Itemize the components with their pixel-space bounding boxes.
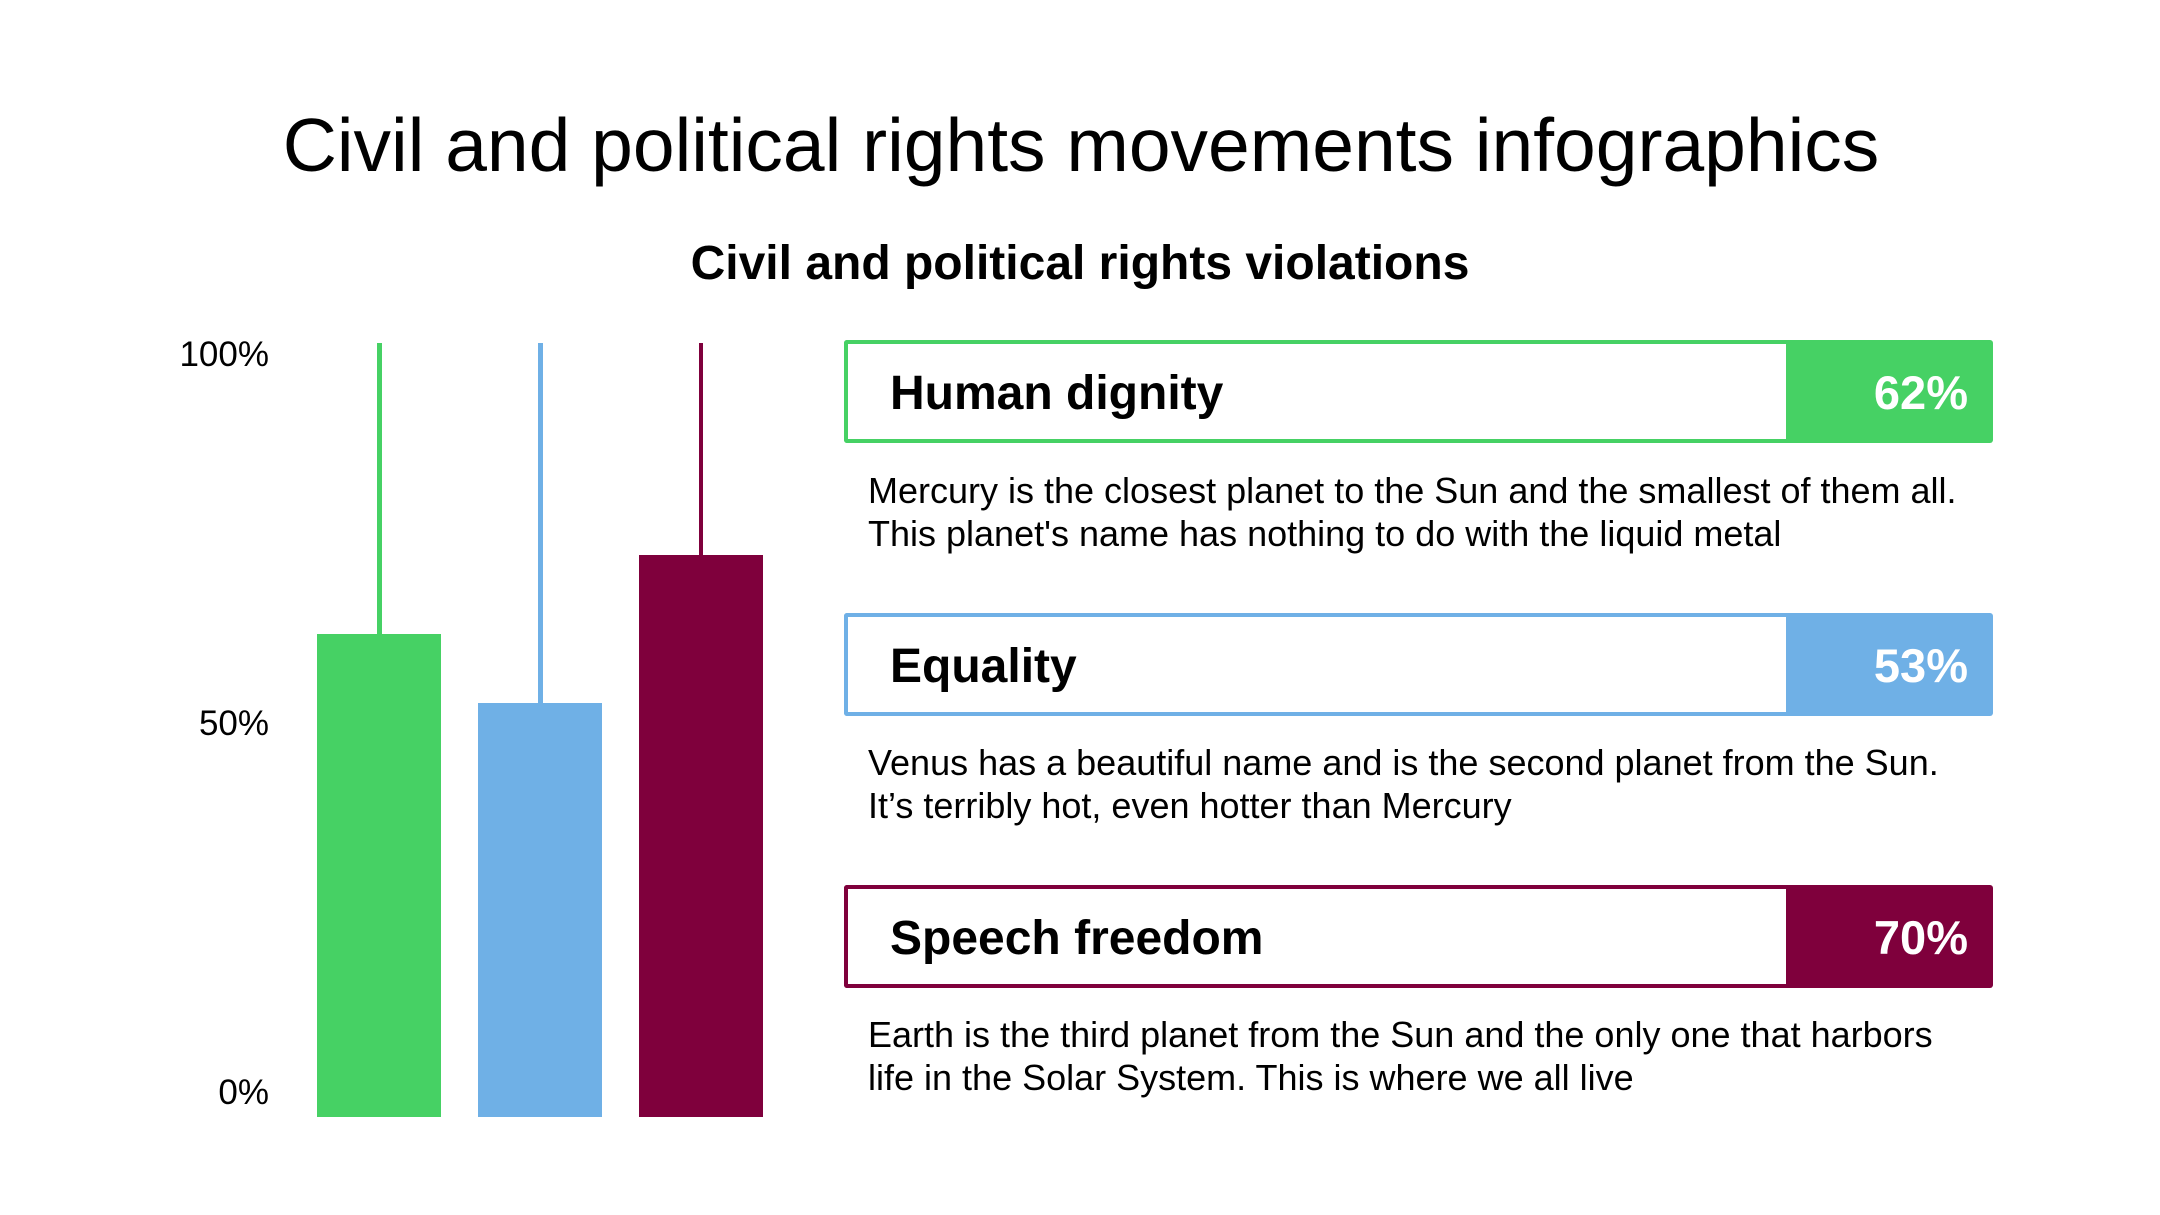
bar: blue 53%	[478, 703, 602, 1117]
line: blue	[538, 343, 542, 705]
text: Speech freedom description: life in the Solar System. This is where we all live	[868, 1057, 1634, 1098]
text: Speech freedom description: Earth is the third planet from the Sun and the only one that harbors	[868, 1014, 1933, 1055]
heading: Equality	[890, 640, 1077, 693]
percent tab	[1786, 340, 1993, 443]
panel: Equality	[844, 613, 1993, 716]
text: Speech freedom description	[868, 1014, 1933, 1098]
heading: Speech freedom	[890, 912, 1263, 965]
panel: Human dignity	[844, 340, 1993, 443]
heading: Human dignity	[890, 367, 1223, 420]
text: Human dignity description: Mercury is the closest planet to the Sun and the smallest of them all.	[868, 470, 1957, 511]
text: Human dignity description	[868, 470, 1957, 554]
line: green	[377, 343, 382, 635]
outline box	[844, 885, 1786, 988]
panel: Speech freedom	[844, 885, 1993, 988]
text: Equality description	[868, 742, 1939, 826]
bar: maroon 70%	[639, 555, 763, 1117]
text: Equality description: Venus has a beautiful name and is the second planet from the Sun.	[868, 742, 1939, 783]
outline box	[844, 613, 1786, 716]
text: Equality description: It’s terribly hot, even hotter than Mercury	[868, 785, 1512, 826]
percent tab	[1786, 613, 1993, 716]
value: 62%	[1874, 366, 1968, 419]
text: Human dignity description: This planet's name has nothing to do with the liquid metal	[868, 513, 1781, 554]
axis label: 50%: 50%	[199, 704, 269, 743]
outline box	[844, 340, 1786, 443]
subtitle: Civil and political rights violations	[691, 237, 1469, 290]
value: 70%	[1874, 911, 1968, 964]
axis label: 100%: 100%	[179, 335, 269, 374]
axis label: 0%: 0%	[218, 1073, 269, 1112]
bar chart	[179, 335, 763, 1117]
value: 53%	[1874, 639, 1968, 692]
bar: green 62%	[317, 634, 441, 1117]
title: Civil and political rights movements infographics	[283, 103, 1879, 187]
percent tab	[1786, 885, 1993, 988]
line: maroon	[698, 343, 703, 557]
